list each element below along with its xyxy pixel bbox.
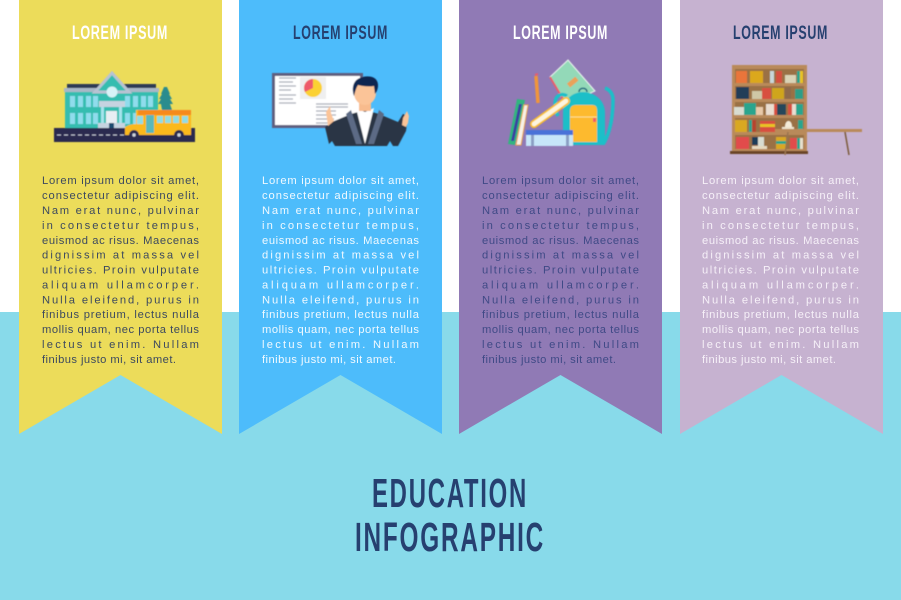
panel: mauve ribbon (680, 0, 883, 434)
body text: panel 4: ultricies. Proin vulputate (702, 264, 859, 276)
body text: panel 2: mollis quam, nec porta tellus (262, 324, 419, 336)
body text: panel 1: lectus ut enim. Nullam (42, 339, 199, 351)
title: EDUCATION (372, 470, 528, 516)
panel: blue ribbon (239, 0, 442, 434)
body text: panel 4: aliquam ullamcorper. (702, 280, 859, 292)
body text: panel 4 (702, 175, 860, 366)
body text: panel 4: Lorem ipsum dolor sit amet, (702, 175, 859, 187)
heading: panel 1: LOREM IPSUM (72, 23, 168, 44)
body text: panel 2: aliquam ullamcorper. (262, 280, 419, 292)
body text: panel 3: consectetur adipiscing elit. (482, 190, 639, 202)
body text: panel 3: Lorem ipsum dolor sit amet, (482, 175, 639, 187)
icon: teacher at presentation board (274, 74, 409, 146)
title (355, 470, 545, 560)
body text: panel 2: finibus pretium, lectus nulla (262, 309, 420, 321)
body text: panel 2: euismod ac risus. Maecenas (262, 235, 419, 247)
body text: panel 1: dignissim at massa vel (42, 250, 199, 262)
body text: panel 4: euismod ac risus. Maecenas (702, 235, 859, 247)
body text: panel 3: Nulla eleifend, purus in (482, 294, 639, 306)
body text: panel 2: ultricies. Proin vulputate (262, 264, 419, 276)
body text: panel 3: ultricies. Proin vulputate (482, 264, 639, 276)
body text: panel 1: euismod ac risus. Maecenas (42, 235, 199, 247)
body text: panel 4: consectetur adipiscing elit. (702, 190, 859, 202)
body text: panel 2: lectus ut enim. Nullam (262, 339, 419, 351)
body text: panel 2 (262, 175, 420, 366)
body text: panel 4: Nulla eleifend, purus in (702, 294, 859, 306)
body text: panel 2: Nulla eleifend, purus in (262, 294, 419, 306)
heading: panel 3: LOREM IPSUM (513, 23, 608, 44)
body text: panel 1: in consectetur tempus, (42, 220, 199, 232)
panel: yellow ribbon (19, 0, 222, 434)
body text: panel 2: in consectetur tempus, (262, 220, 419, 232)
heading: panel 2: LOREM IPSUM (293, 23, 388, 44)
body text: panel 1: mollis quam, nec porta tellus (42, 324, 199, 336)
body text: panel 1: ultricies. Proin vulputate (42, 264, 199, 276)
body text: panel 3: finibus pretium, lectus nulla (482, 309, 640, 321)
body text: panel 2: dignissim at massa vel (262, 250, 419, 262)
body text: panel 2: Nam erat nunc, pulvinar (262, 205, 419, 217)
body text: panel 1: Lorem ipsum dolor sit amet, (42, 175, 199, 187)
body text: panel 3: aliquam ullamcorper. (482, 280, 639, 292)
body text: panel 1: Nam erat nunc, pulvinar (42, 205, 199, 217)
body text: panel 4: Nam erat nunc, pulvinar (702, 205, 859, 217)
body text: panel 2: finibus justo mi, sit amet. (262, 354, 396, 366)
body text: panel 1: finibus pretium, lectus nulla (42, 309, 200, 321)
body text: panel 4: in consectetur tempus, (702, 220, 859, 232)
heading: panel 4: LOREM IPSUM (733, 23, 828, 44)
title: INFOGRAPHIC (355, 514, 545, 560)
body text: panel 2: consectetur adipiscing elit. (262, 190, 419, 202)
body text: panel 1: aliquam ullamcorper. (42, 280, 199, 292)
body text: panel 3: in consectetur tempus, (482, 220, 639, 232)
body text: panel 3: dignissim at massa vel (482, 250, 639, 262)
icon: bookcase and desk (730, 65, 862, 155)
body text: panel 4: mollis quam, nec porta tellus (702, 324, 859, 336)
body text: panel 1 (42, 175, 200, 366)
icon: backpack, books and pencils (508, 60, 613, 146)
icon: school building and bus (54, 73, 195, 142)
body text: panel 2: Lorem ipsum dolor sit amet, (262, 175, 419, 187)
body text: panel 3 (482, 175, 640, 366)
panel: purple ribbon (459, 0, 662, 434)
body text: panel 4: dignissim at massa vel (702, 250, 859, 262)
body text: panel 3: Nam erat nunc, pulvinar (482, 205, 639, 217)
body text: panel 3: lectus ut enim. Nullam (482, 339, 639, 351)
body text: panel 3: euismod ac risus. Maecenas (482, 235, 639, 247)
body text: panel 4: lectus ut enim. Nullam (702, 339, 859, 351)
body text: panel 1: finibus justo mi, sit amet. (42, 354, 176, 366)
body text: panel 3: finibus justo mi, sit amet. (482, 354, 616, 366)
body text: panel 4: finibus justo mi, sit amet. (702, 354, 836, 366)
body text: panel 1: consectetur adipiscing elit. (42, 190, 199, 202)
body text: panel 4: finibus pretium, lectus nulla (702, 309, 860, 321)
body text: panel 1: Nulla eleifend, purus in (42, 294, 199, 306)
body text: panel 3: mollis quam, nec porta tellus (482, 324, 639, 336)
